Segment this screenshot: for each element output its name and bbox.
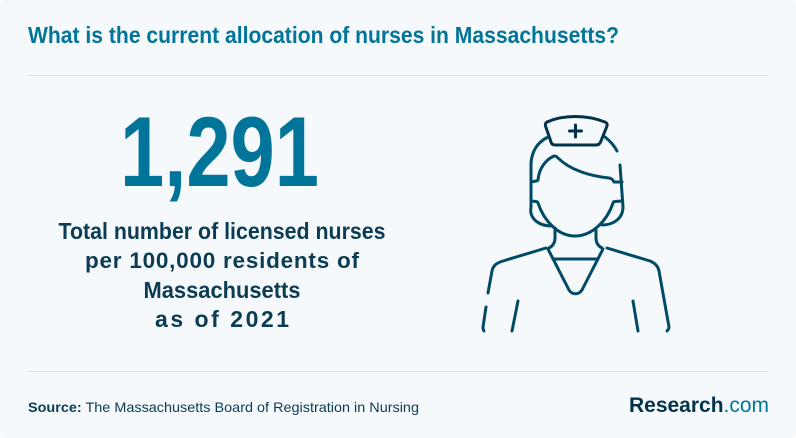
logo: Research.com — [629, 394, 769, 417]
icon: neck — [549, 228, 555, 248]
icon: ears and face — [531, 180, 538, 182]
description text: Total number of licensed nurses — [58, 218, 386, 244]
big number: 1,291 — [120, 96, 319, 207]
icon: nurse cap — [545, 116, 607, 145]
icon: hair — [531, 137, 552, 226]
description text: as of 2021 — [155, 306, 289, 332]
icon: scrubs collar — [548, 249, 603, 294]
description text — [58, 218, 386, 332]
source note: Source: The Massachusetts Board of Registration in Nursing — [28, 399, 419, 415]
icon: nurse — [483, 116, 669, 331]
icon: shoulders and arms — [488, 248, 546, 293]
title: What is the current allocation of nurses in Massachusetts? — [28, 22, 619, 48]
description text: Massachusetts — [144, 277, 300, 303]
description text: per 100,000 residents of — [85, 248, 360, 273]
